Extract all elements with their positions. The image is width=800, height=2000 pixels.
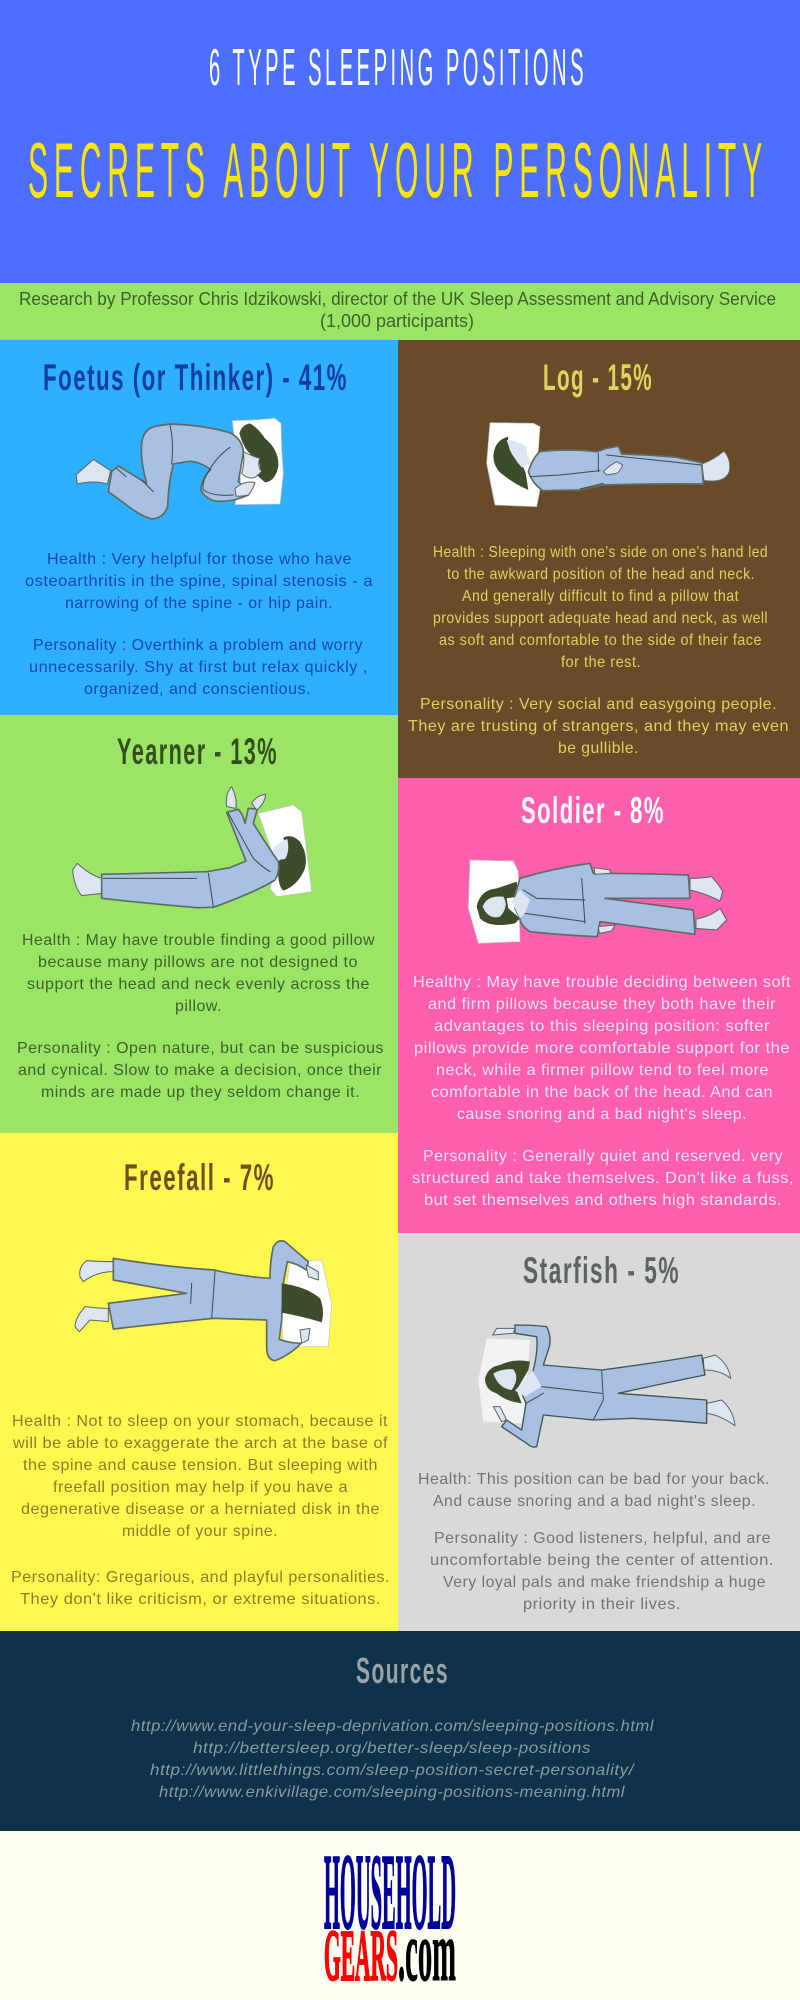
soldier personality text: structured and take themselves. Don't like a fuss, (412, 1170, 794, 1187)
sources list: http://www.end-your-sleep-deprivation.com/sleeping-positions.html (131, 1718, 654, 1735)
yearner health text: pillow. (175, 998, 222, 1015)
log health text: And generally difficult to find a pillow that (462, 588, 739, 605)
panel: foetus (0, 340, 398, 715)
log health text: to the awkward position of the head and neck. (447, 566, 755, 583)
soldier health text: cause snoring and a bad night's sleep. (457, 1106, 747, 1123)
freefall personality text: They don't like criticism, or extreme situations. (20, 1591, 381, 1608)
freefall health text: middle of your spine. (122, 1523, 278, 1540)
log personality text (408, 696, 789, 757)
log heading: Log - 15% (543, 357, 653, 398)
sources background (0, 1631, 800, 1831)
footer panel: .com (398, 1903, 456, 1999)
logo: GEARS (324, 1915, 398, 1996)
freefall health text (12, 1413, 388, 1540)
yearner health text: because many pillows are not designed to (38, 954, 358, 971)
icon: yearner sleeper (73, 787, 312, 908)
soldier health text: Healthy : May have trouble deciding between soft (413, 974, 791, 991)
panel: freefall (0, 1133, 398, 1631)
sources list: http://www.enkivillage.com/sleeping-positions-meaning.html (159, 1784, 625, 1801)
header background (0, 0, 800, 283)
freefall personality text (11, 1569, 390, 1608)
icon: log sleeper (487, 423, 730, 507)
freefall health text: will be able to exaggerate the arch at the base of (12, 1435, 388, 1452)
sources list: http://bettersleep.org/better-sleep/sleep-positions (193, 1740, 591, 1757)
soldier health text: neck, while a firmer pillow tend to feel more (436, 1062, 769, 1079)
starfish personality text (430, 1530, 774, 1613)
research note band (0, 283, 800, 340)
log personality text: They are trusting of strangers, and they may even (408, 718, 789, 735)
starfish personality text: Very loyal pals and make friendship a huge (443, 1574, 766, 1591)
sources list: http://www.littlethings.com/sleep-position-secret-personality/ (150, 1762, 635, 1779)
foetus health text: osteoarthritis in the spine, spinal stenosis - a (25, 573, 373, 590)
foetus health text: narrowing of the spine - or hip pain. (65, 595, 333, 612)
panel: starfish (398, 1233, 800, 1631)
sources list (131, 1718, 654, 1801)
yearner health text: support the head and neck evenly across the (27, 976, 370, 993)
foetus background (0, 340, 398, 715)
yearner health text: Health : May have trouble finding a good pillow (22, 932, 375, 949)
foetus personality text: Personality : Overthink a problem and worry (33, 637, 363, 654)
soldier background (398, 778, 800, 1233)
starfish health text: And cause snoring and a bad night's sleep. (433, 1493, 756, 1510)
freefall health text: Health : Not to sleep on your stomach, because it (12, 1413, 388, 1430)
log personality text: be gullible. (558, 740, 639, 757)
icon: foetus sleeper (76, 418, 283, 519)
starfish background (398, 1233, 800, 1631)
yearner personality text: Personality : Open nature, but can be suspicious (17, 1040, 384, 1057)
yearner personality text (17, 1040, 384, 1101)
starfish heading: Starfish - 5% (523, 1250, 680, 1291)
soldier health text (413, 974, 791, 1123)
starfish health text: Health: This position can be bad for your back. (418, 1471, 770, 1488)
yearner personality text: minds are made up they seldom change it. (41, 1084, 360, 1101)
band background (0, 283, 800, 340)
freefall health text: freefall position may help if you have a (53, 1479, 348, 1496)
yearner heading: Yearner - 13% (117, 731, 278, 772)
icon: soldier sleeper (468, 860, 727, 943)
freefall heading: Freefall - 7% (124, 1157, 275, 1198)
freefall personality text: Personality: Gregarious, and playful personalities. (11, 1569, 390, 1586)
foetus health text: Health : Very helpful for those who have (47, 551, 352, 568)
header panel (0, 0, 800, 283)
participants text: (1,000 participants) (320, 310, 474, 331)
starfish personality text: Personality : Good listeners, helpful, and are (434, 1530, 771, 1547)
log health text: as soft and comfortable to the side of their face (439, 632, 762, 649)
log health text: for the rest. (561, 654, 641, 671)
log health text (433, 544, 768, 671)
soldier personality text: but set themselves and others high standards. (424, 1192, 782, 1209)
foetus health text (25, 551, 373, 612)
soldier health text: advantages to this sleeping position: softer (434, 1018, 770, 1035)
foetus personality text: organized, and conscientious. (84, 681, 311, 698)
log background (398, 340, 800, 778)
foetus personality text (29, 637, 368, 698)
panel: log (398, 340, 800, 778)
freefall background (0, 1133, 398, 1631)
sources heading: Sources (356, 1650, 449, 1691)
soldier health text: comfortable in the back of the head. And can (431, 1084, 773, 1101)
panel: soldier (398, 778, 800, 1233)
icon: starfish sleeper (478, 1325, 735, 1447)
starfish personality text: uncomfortable being the center of attention. (430, 1552, 774, 1569)
panel: yearner (0, 715, 398, 1133)
soldier heading: Soldier - 8% (521, 790, 665, 831)
foetus heading: Foetus (or Thinker) - 41% (43, 357, 348, 398)
icon: freefall sleeper (75, 1241, 332, 1361)
soldier personality text (412, 1148, 794, 1209)
log personality text: Personality : Very social and easygoing people. (420, 696, 777, 713)
soldier health text: pillows provide more comfortable support for the (414, 1040, 790, 1057)
panel: sources (0, 1631, 800, 1831)
starfish health text (418, 1471, 770, 1510)
freefall health text: degenerative disease or a herniated disk in the (21, 1501, 380, 1518)
yearner health text (22, 932, 375, 1015)
soldier personality text: Personality : Generally quiet and reserved. very (423, 1148, 783, 1165)
soldier health text: and firm pillows because they both have their (428, 996, 776, 1013)
footer background (0, 1831, 800, 2000)
foetus personality text: unnecessarily. Shy at first but relax quickly , (29, 659, 368, 676)
freefall health text: the spine and cause tension. But sleeping with (23, 1457, 378, 1474)
footer panel (0, 1831, 800, 2000)
yearner background (0, 715, 398, 1133)
logo (324, 1833, 456, 1999)
starfish personality text: priority in their lives. (523, 1596, 681, 1613)
yearner personality text: and cynical. Slow to make a decision, once their (18, 1062, 382, 1079)
